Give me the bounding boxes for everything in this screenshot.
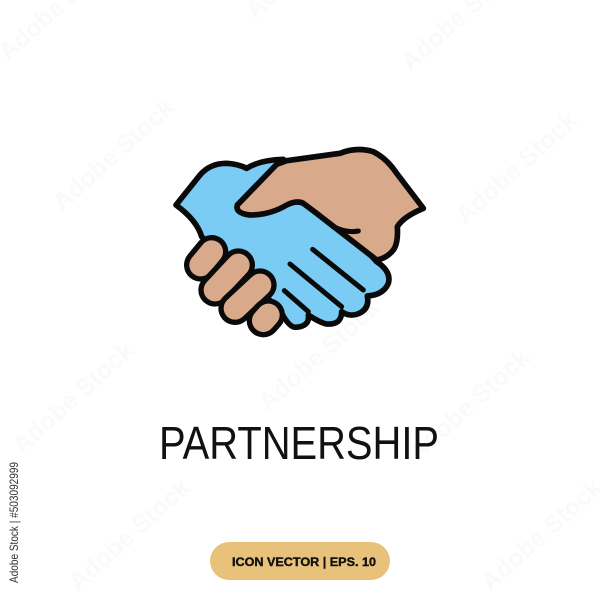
watermark pattern: Adobe Stock: [403, 343, 536, 466]
badge: icon vector: ICON VECTOR | EPS. 10: [232, 555, 376, 569]
credit text: Adobe Stock | #503092999: [7, 462, 21, 583]
badge: icon vector: [210, 542, 390, 580]
blue hand: [176, 159, 389, 327]
watermark pattern: Adobe Stock: [450, 106, 583, 229]
watermark pattern: Adobe Stock: [253, 293, 386, 416]
watermark pattern: Adobe Stock: [7, 336, 140, 459]
brown hand: [237, 150, 423, 260]
watermark pattern: Adobe Stock: [47, 93, 180, 216]
icon: handshake: [176, 150, 423, 327]
finger creases: [284, 227, 363, 312]
watermark pattern: Adobe Stock: [63, 473, 196, 596]
title: PARTNERSHIP: [159, 417, 439, 469]
brown fingers: [201, 252, 268, 321]
